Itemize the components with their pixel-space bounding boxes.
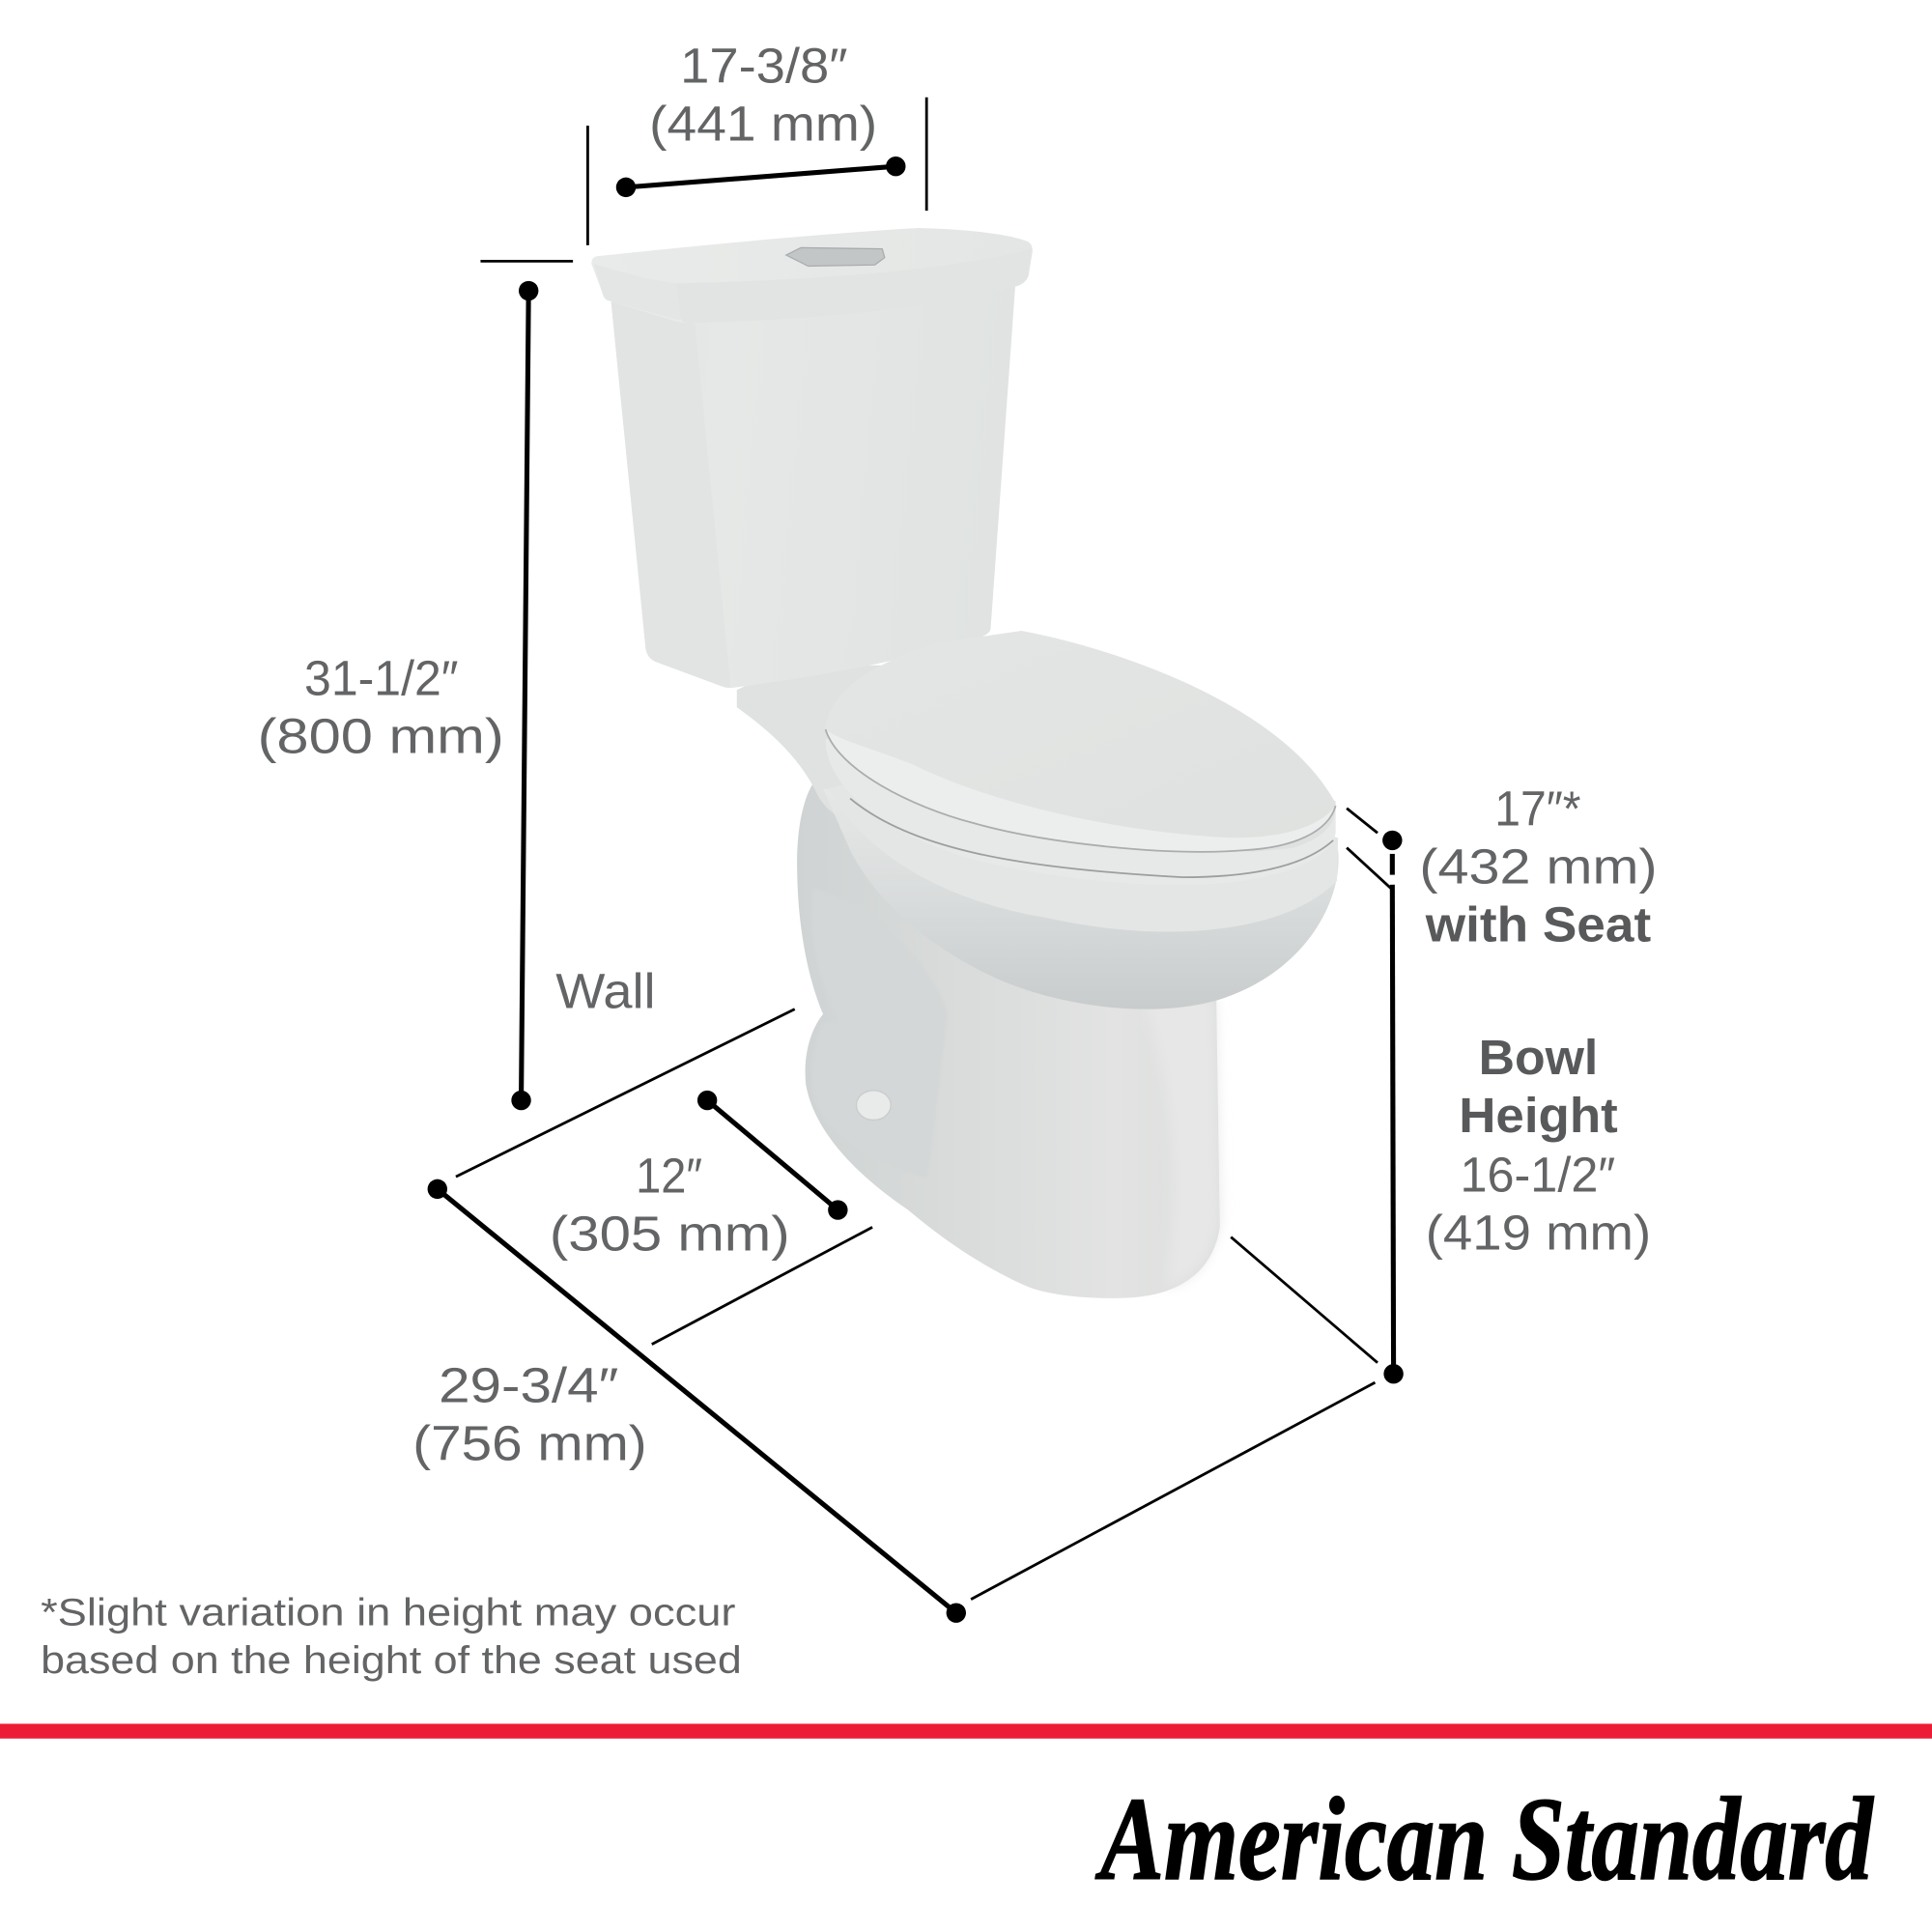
label: overall height: (800 mm)	[258, 708, 504, 763]
label: overall depth: 29-3/4″	[439, 1358, 618, 1413]
label: tank width: (441 mm)	[649, 96, 877, 151]
label: height with seat: 17″*	[1494, 781, 1581, 837]
toilet: tank body	[611, 286, 1015, 688]
label: tank width	[649, 38, 877, 151]
label: overall height: 31-1/2″	[304, 650, 458, 705]
toilet: seat ring	[826, 690, 1336, 885]
label: bowl height: Bowl	[1479, 1030, 1598, 1085]
footnote: based on the height of the seat used	[41, 1639, 742, 1682]
dimension: tank width	[587, 98, 926, 245]
toilet: seat gap shadow	[850, 799, 1333, 877]
toilet: seat cover	[826, 631, 1336, 852]
label: wall: Wall	[555, 963, 656, 1018]
toilet: lid side face	[594, 264, 680, 321]
toilet: pedestal and base	[797, 781, 1220, 1298]
label: bowl height	[1426, 1030, 1651, 1260]
toilet: tank side face	[611, 301, 730, 688]
dimension: overall depth	[428, 1179, 1375, 1623]
label: bowl height: Height	[1459, 1088, 1618, 1143]
label: height with seat: (432 mm)	[1419, 839, 1658, 895]
toilet: cover edge	[826, 729, 1336, 852]
label: rough-in: (305 mm)	[550, 1207, 790, 1262]
label: rough-in	[550, 1149, 790, 1262]
dimension: bowl height	[1231, 809, 1404, 1383]
label: rough-in: 12″	[636, 1149, 702, 1204]
toilet: pedestal highlight	[1140, 985, 1220, 1288]
label: overall height	[258, 650, 504, 763]
red divider bar	[0, 1723, 1932, 1739]
toilet: tank lid	[591, 228, 1033, 323]
label: tank width: 17-3/8″	[680, 38, 848, 93]
label: bowl height: 16-1/2″	[1460, 1147, 1615, 1202]
footnote: *Slight variation in height may occur	[41, 1591, 735, 1634]
toilet: base bolt cap	[856, 1091, 891, 1120]
label: bowl height: (419 mm)	[1426, 1205, 1651, 1260]
toilet: bowl upper rim	[828, 739, 1338, 932]
toilet: flush button	[786, 247, 885, 267]
dimension: overall height	[480, 261, 573, 1110]
toilet: lid front face	[676, 249, 1032, 323]
dimension: rough-in	[456, 1009, 872, 1345]
toilet: neck	[737, 666, 936, 817]
label: height with seat: with Seat	[1425, 896, 1651, 952]
footnote	[41, 1591, 742, 1682]
toilet: base inner panel shading	[811, 887, 948, 1178]
toilet illustration	[591, 228, 1339, 1298]
label: overall depth	[412, 1358, 647, 1470]
toilet: bowl	[823, 788, 1339, 1009]
toilet: cover lip	[826, 729, 1336, 852]
label: overall depth: (756 mm)	[412, 1415, 647, 1470]
label: height with seat	[1419, 781, 1658, 952]
